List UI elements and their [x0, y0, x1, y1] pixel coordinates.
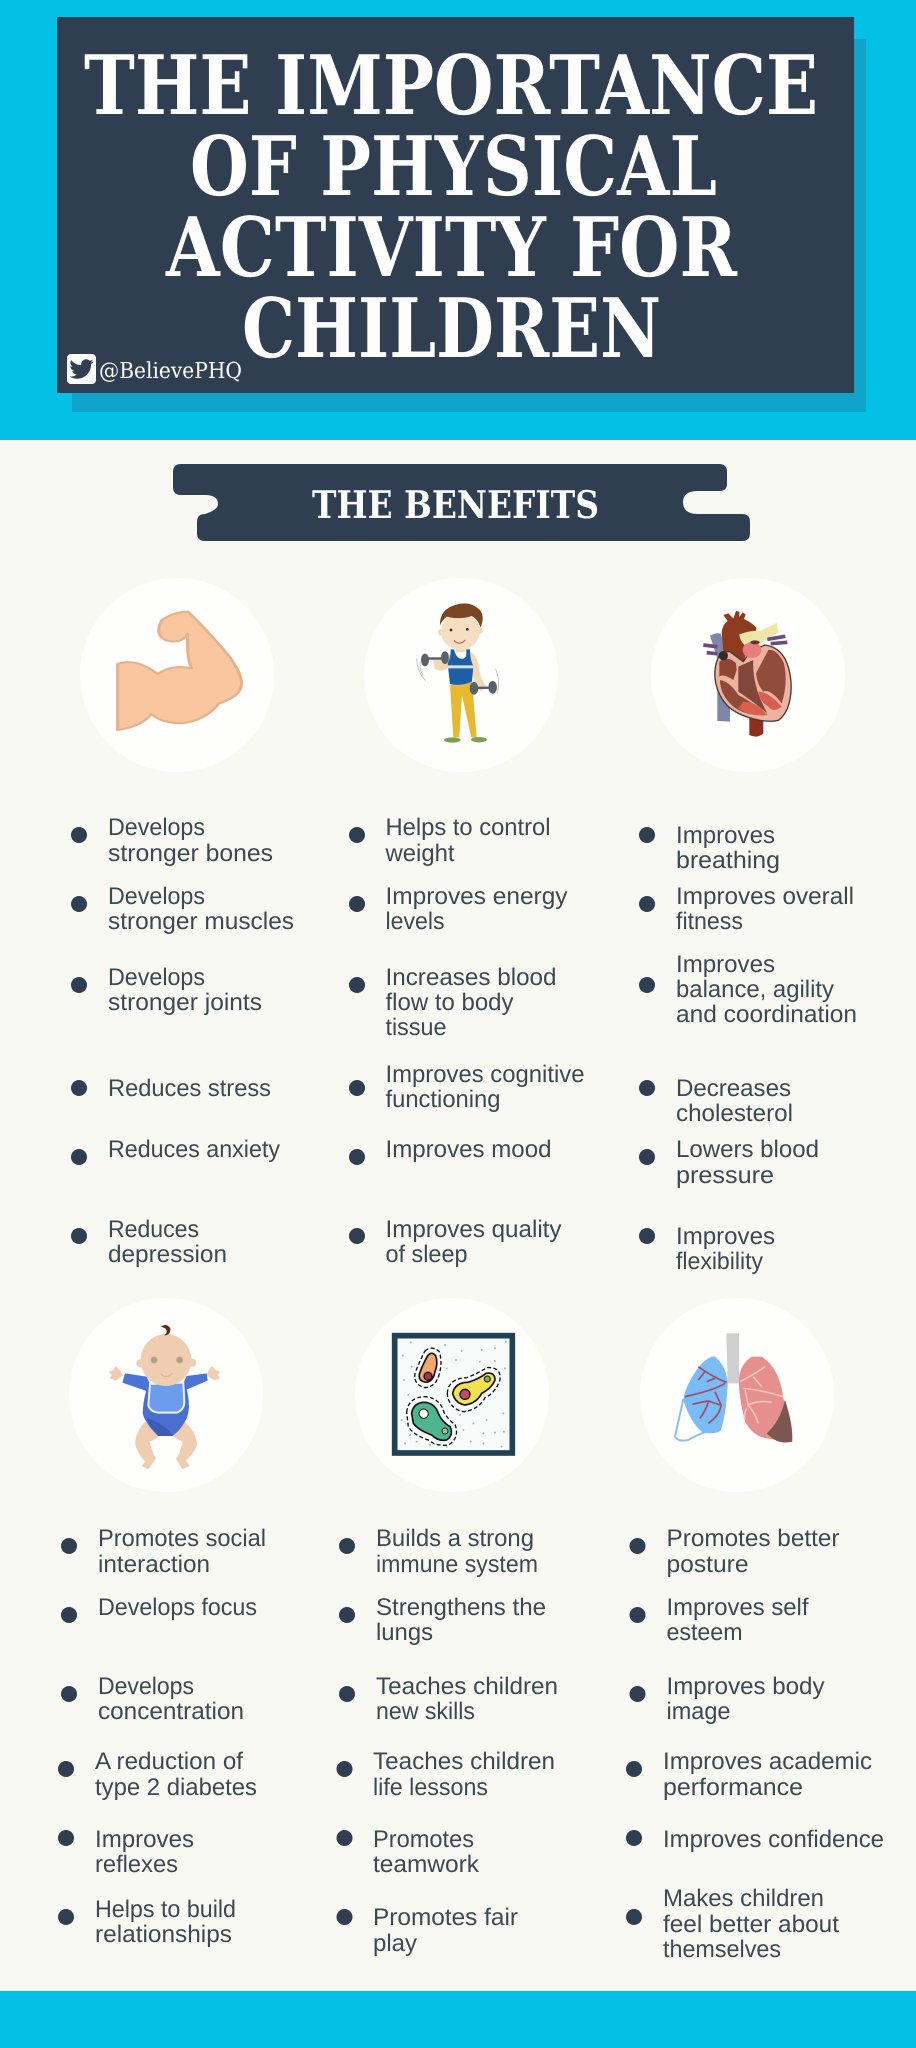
- item: control weight: [349, 814, 550, 867]
- icon: baby: [69, 1298, 263, 1492]
- item: flexibility: flexibility: [676, 1248, 763, 1275]
- item: immune system: [339, 1525, 538, 1578]
- item: stronger muscles: stronger muscles: [108, 908, 294, 935]
- left dumbbell: [426, 657, 445, 660]
- vest: [448, 649, 473, 685]
- shoes: [444, 737, 461, 743]
- item: feel better: feel better about: [663, 1911, 839, 1938]
- diseased lobe: [767, 1400, 792, 1443]
- item: cognitive functioning: [349, 1061, 584, 1113]
- item: cholesterol: [639, 1075, 793, 1127]
- right dumbbell: [474, 687, 493, 689]
- item: fair play: [336, 1904, 518, 1957]
- item: cholesterol: Decreases: [676, 1075, 791, 1102]
- item: social interaction: interaction: [98, 1551, 210, 1578]
- icon: boy with dumbbells: [364, 578, 558, 772]
- item: stronger muscles: [71, 883, 294, 935]
- item: posture: [630, 1525, 840, 1578]
- hands: [109, 1366, 220, 1381]
- item: reduces stress: Reduces stress: [108, 1075, 271, 1102]
- item: concentration: Develops: [98, 1673, 194, 1700]
- item: social interaction: Promotes social: [98, 1525, 266, 1552]
- trachea: [726, 1333, 739, 1383]
- specks: [401, 1341, 507, 1448]
- item: stronger bones: Develops: [108, 814, 205, 841]
- left lung: [683, 1357, 728, 1433]
- item: reduces depression: [71, 1216, 227, 1268]
- item: overall fitness: [639, 883, 854, 935]
- header band: [0, 0, 916, 440]
- item: academic performance: [626, 1748, 872, 1801]
- twitter handle: [67, 354, 242, 384]
- curl: [161, 1325, 170, 1335]
- item: balance: and coordination: [676, 1001, 857, 1028]
- item: cognitive functioning: functioning: [386, 1086, 500, 1113]
- item: mood: Improves mood: [386, 1136, 552, 1163]
- item: diabetes: type 2 diabetes: [95, 1774, 257, 1801]
- title panel: [57, 17, 854, 393]
- item: body image: image: [666, 1698, 730, 1725]
- item: concentration: concentration: [98, 1698, 244, 1725]
- item: concentration: [61, 1673, 244, 1725]
- item: stronger joints: [71, 964, 262, 1016]
- item: sleep: of sleep: [386, 1241, 468, 1268]
- item: teamwork: [336, 1826, 480, 1878]
- item: social interaction: [61, 1525, 266, 1578]
- chambers: [719, 659, 737, 680]
- legs: [135, 1422, 163, 1469]
- head: [136, 1359, 144, 1367]
- item: lungs: [339, 1594, 546, 1646]
- icon: heart: [651, 578, 845, 772]
- item: energy levels: [349, 883, 568, 935]
- item: lungs: Strengthens the: [376, 1594, 546, 1621]
- body: [143, 1385, 189, 1436]
- item: feel better: [626, 1885, 839, 1963]
- icon: muscle: [80, 578, 274, 772]
- list: heart benefits: [639, 822, 857, 1275]
- item: reflexes: [58, 1826, 194, 1878]
- item: life lessons: Teaches children: [373, 1748, 555, 1775]
- item: self esteem: Improves self: [666, 1594, 809, 1621]
- item: breathing: Improves: [676, 822, 775, 849]
- item: life lessons: life lessons: [373, 1774, 488, 1801]
- footer band: [0, 1991, 916, 2048]
- item: confidence: Improves confidence: [663, 1826, 884, 1853]
- item: posture: posture: [666, 1551, 748, 1578]
- twitter handle: @BelievePHQ: [99, 359, 242, 384]
- collapsed outline: [675, 1399, 705, 1441]
- item: blood flow: flow to body: [386, 989, 514, 1016]
- item: flexibility: [639, 1223, 775, 1275]
- item: fair play: Promotes fair: [373, 1904, 518, 1931]
- item: stronger muscles: Develops: [108, 883, 205, 910]
- title: CHILDREN: [242, 281, 661, 377]
- item: lungs: lungs: [376, 1619, 433, 1646]
- item: reflexes: Improves: [95, 1826, 194, 1853]
- left branches: [685, 1367, 727, 1423]
- item: new skills: [339, 1673, 558, 1725]
- item: breathing: [639, 822, 780, 874]
- icon: twitter bird: [67, 354, 96, 384]
- item: self esteem: [630, 1594, 809, 1646]
- item: flexibility: Improves: [676, 1223, 775, 1250]
- item: self esteem: esteem: [666, 1619, 742, 1646]
- item: sleep: Improves quality: [386, 1216, 562, 1243]
- item: posture: Promotes better: [666, 1525, 840, 1552]
- item: reflexes: reflexes: [95, 1851, 178, 1878]
- item: blood pressure: pressure: [676, 1162, 774, 1189]
- item: feel better: Makes children: [663, 1885, 824, 1912]
- title: ACTIVITY FOR: [165, 200, 738, 296]
- frame: [395, 1336, 512, 1453]
- right lung: [739, 1357, 792, 1442]
- item: overall fitness: fitness: [676, 908, 743, 935]
- item: stronger bones: [71, 814, 273, 867]
- item: focus: Develops focus: [98, 1594, 257, 1621]
- item: relationships: Helps to build: [95, 1896, 236, 1923]
- orange cell: [415, 1348, 441, 1388]
- item: feel better: themselves: [663, 1936, 781, 1963]
- item: new skills: new skills: [376, 1698, 475, 1725]
- item: life lessons: [336, 1748, 555, 1801]
- item: immune system: immune system: [376, 1551, 538, 1578]
- item: relationships: [58, 1896, 236, 1948]
- heading banner: the benefits: [173, 464, 750, 541]
- list: immune benefits: [336, 1525, 558, 1957]
- bib: [148, 1383, 184, 1413]
- title: [84, 38, 818, 377]
- item: blood flow: [349, 964, 556, 1041]
- veins: [710, 633, 730, 722]
- item: immune system: Builds a strong: [376, 1525, 534, 1552]
- item: reduces anxiety: Reduces anxiety: [108, 1136, 280, 1163]
- head: [438, 629, 443, 636]
- item: stronger joints: Develops: [108, 964, 205, 991]
- item: body image: Improves body: [666, 1673, 824, 1700]
- item: balance: balance, agility: [676, 976, 834, 1003]
- item: control weight: Helps to control: [386, 814, 550, 841]
- item: energy levels: Improves energy: [386, 883, 568, 910]
- lower vessel: [749, 718, 763, 737]
- icon: lungs: [640, 1298, 834, 1492]
- item: blood pressure: Lowers blood: [676, 1136, 819, 1163]
- item: stronger bones: stronger bones: [108, 840, 273, 867]
- aorta: [722, 611, 757, 662]
- item: energy levels: levels: [386, 908, 444, 935]
- green cell: [407, 1397, 456, 1445]
- item: balance: Improves: [676, 951, 775, 978]
- item: fair play: play: [373, 1930, 417, 1957]
- list: lungs benefits: [626, 1525, 884, 1963]
- item: teamwork: teamwork: [373, 1851, 480, 1878]
- item: academic performance: Improves academic: [663, 1748, 872, 1775]
- title: OF PHYSICAL: [190, 119, 717, 215]
- item: blood flow: Increases blood: [386, 964, 556, 991]
- title panel shadow: [72, 39, 866, 412]
- item: breathing: breathing: [676, 847, 780, 874]
- item: stronger joints: stronger joints: [108, 989, 262, 1016]
- pulmonary artery: [739, 623, 779, 646]
- motion lines: [417, 658, 499, 693]
- item: balance: [639, 951, 857, 1028]
- hair: [440, 603, 483, 627]
- arms: [433, 653, 450, 671]
- item: teamwork: Promotes: [373, 1826, 474, 1853]
- list: boy benefits: [349, 814, 584, 1268]
- item: reduces depression: Reduces: [108, 1216, 199, 1243]
- item: cholesterol: cholesterol: [676, 1100, 793, 1127]
- item: reduces depression: depression: [108, 1241, 227, 1268]
- trousers: [450, 681, 477, 737]
- main body: [715, 645, 791, 721]
- item: cognitive functioning: Improves cognitive: [386, 1061, 584, 1088]
- item: sleep: [349, 1216, 562, 1268]
- right branches: [740, 1367, 783, 1423]
- item: body image: [630, 1673, 824, 1725]
- sleeves: [122, 1373, 153, 1392]
- item: blood pressure: [639, 1136, 819, 1189]
- icon: immune cells: [355, 1298, 549, 1492]
- heading banner: the benefits: THE BENEFITS: [312, 482, 599, 527]
- item: diabetes: A reduction of: [95, 1748, 243, 1775]
- list: baby benefits: [58, 1525, 266, 1948]
- yellow cell: [447, 1368, 500, 1412]
- item: blood flow: tissue: [386, 1014, 446, 1041]
- item: control weight: weight: [385, 840, 455, 867]
- list: muscle benefits: [71, 814, 294, 1268]
- item: relationships: relationships: [95, 1921, 232, 1948]
- item: new skills: Teaches children: [376, 1673, 558, 1700]
- item: academic performance: performance: [663, 1774, 803, 1801]
- item: overall fitness: Improves overall: [676, 883, 854, 910]
- item: diabetes: [58, 1748, 257, 1801]
